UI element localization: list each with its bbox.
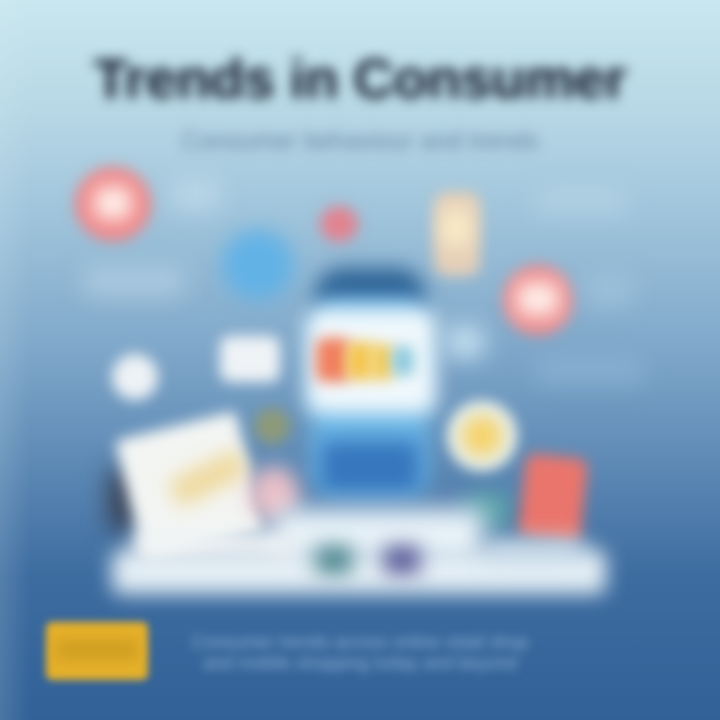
icon: red badge right <box>494 256 581 344</box>
footer text: and mobile shopping today and beyond <box>203 653 517 673</box>
icon: envelope card <box>220 336 280 382</box>
phone body <box>312 298 428 496</box>
icon: red small circle <box>320 206 358 242</box>
left edge glow <box>0 0 30 720</box>
footer text <box>190 632 530 676</box>
subtitle: Consumer behaviour and trends <box>181 127 539 155</box>
product thumbnails <box>316 546 352 574</box>
phone lower dark <box>320 440 420 494</box>
icon: small white card left <box>112 354 158 400</box>
document card <box>107 404 270 558</box>
icon: red badge left <box>67 158 159 250</box>
red phone right <box>518 453 588 543</box>
central phone <box>292 254 450 504</box>
colourful logo <box>306 328 422 392</box>
title: Trends in Consumer <box>94 47 626 110</box>
text block: left <box>84 266 184 298</box>
icon: small white right of phone <box>446 326 484 358</box>
text block: right lower <box>536 358 644 384</box>
pink object <box>248 466 300 522</box>
dark figure left of paper <box>108 470 142 530</box>
icon: phone upper right <box>425 184 488 284</box>
text block: right <box>584 276 634 306</box>
footer text: Consumer trends across online retail shop <box>191 632 529 652</box>
phone screen <box>306 308 436 414</box>
platform <box>97 490 621 610</box>
phone top dark <box>316 268 424 326</box>
icon: small olive circle <box>254 408 290 444</box>
small text: upper right <box>536 188 626 214</box>
teal object <box>466 492 510 528</box>
icon: blue phone circle <box>222 230 294 300</box>
yellow badge <box>40 616 154 686</box>
small text: upper left <box>172 180 220 210</box>
icon: gold circle <box>438 392 526 480</box>
